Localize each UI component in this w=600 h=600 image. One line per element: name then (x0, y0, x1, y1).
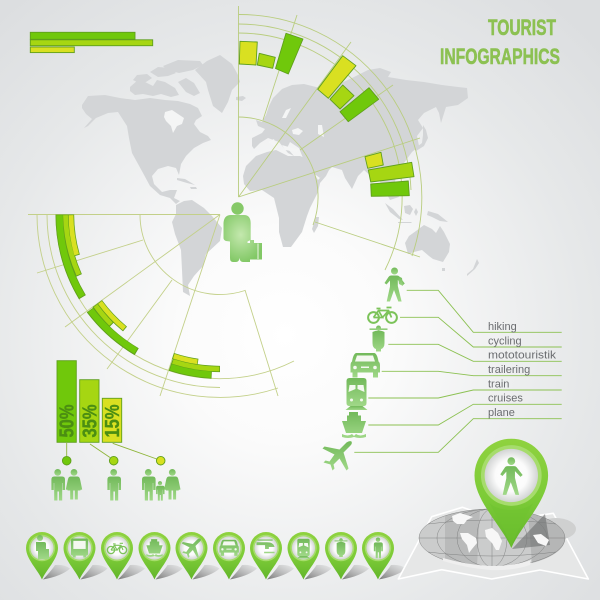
transport labels: mototouristik (488, 350, 557, 362)
transport labels: cycling (488, 335, 522, 347)
folded world map (398, 507, 588, 579)
pin: tourist (26, 532, 70, 580)
transport labels: cruises (488, 393, 523, 405)
percentage bar chart: 15% (102, 404, 124, 438)
percentage bar chart: 50% (56, 404, 78, 438)
transport icons (322, 268, 405, 470)
transport connector lines (354, 290, 562, 452)
transport labels (488, 321, 557, 419)
title: TOURIST (488, 15, 556, 40)
transport labels: train (488, 378, 509, 390)
radial chart: upper right guide lines (238, 6, 422, 270)
title (440, 15, 560, 69)
transport labels: hiking (488, 321, 517, 333)
pin: train (288, 532, 332, 580)
pin: person (362, 532, 406, 580)
pin: helicopter (250, 532, 294, 580)
percentage bar chart: 35% (79, 404, 101, 438)
pin: ship (138, 532, 182, 580)
map inland seas (164, 108, 324, 152)
people icons (51, 469, 181, 501)
pin: scooter (325, 532, 369, 580)
radial chart: lower left guide lines (28, 214, 294, 397)
horizontal bars (30, 32, 153, 53)
connectors and dots (62, 443, 165, 465)
bottom row of map pins (26, 532, 406, 580)
world map (82, 55, 479, 296)
pin: bus (64, 532, 108, 580)
percentage bar chart (56, 361, 124, 442)
transport labels: trailering (488, 364, 530, 376)
radial chart: upper right bars (239, 33, 414, 196)
pin: plane (176, 532, 220, 580)
large map pin with walking figure (474, 439, 548, 548)
icon: tourist with suitcase (224, 202, 262, 262)
pin: bicycle (101, 532, 145, 580)
pin: car (213, 532, 257, 580)
radial chart: lower left arc bars (59, 214, 220, 375)
transport labels: plane (488, 407, 515, 419)
